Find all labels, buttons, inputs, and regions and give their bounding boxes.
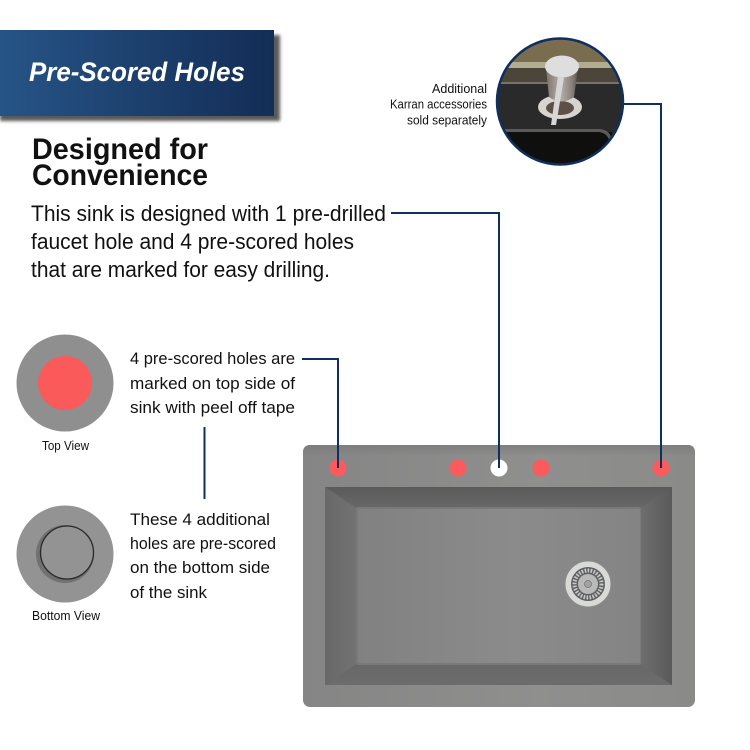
text block: bottom side holes note: holes are pre-scored (130, 534, 276, 553)
pre-drilled faucet hole (490, 460, 508, 476)
text block: top side holes note: marked on top side of (130, 374, 295, 393)
text block: sink description: that are marked for easy drilling. (31, 257, 330, 282)
banner: Pre-Scored Holes (0, 30, 280, 121)
sink basin (325, 487, 672, 685)
text block: accessories note (390, 82, 488, 128)
text block: accessories note: sold separately (407, 114, 488, 128)
leader line: accessory to right hole (622, 104, 661, 468)
sink: top-down illustration (303, 445, 695, 707)
label: Bottom View: Bottom View (32, 609, 101, 623)
text block: accessories note: Additional (432, 82, 487, 96)
text block: sink description: This sink is designed with 1 pre-drilled (31, 201, 386, 226)
text block: bottom side holes note: of the sink (130, 583, 207, 602)
pre-scored hole markers (330, 460, 670, 476)
text block: accessories note: Karran accessories (390, 98, 487, 112)
heading: Designed for Convenience: Designed for (32, 133, 208, 166)
text block: sink description (31, 201, 386, 282)
text block: top side holes note (130, 349, 295, 417)
icon: drain strainer (565, 561, 611, 607)
banner: Pre-Scored Holes: Pre-Scored Holes (29, 57, 245, 87)
leader line: description to faucet hole (391, 213, 499, 468)
divider line between hole notes (204, 427, 206, 499)
text block: bottom side holes note: These 4 additional (130, 510, 270, 529)
heading: Designed for Convenience: Convenience (32, 159, 208, 192)
text block: bottom side holes note (130, 510, 276, 602)
leader line: top side note to left hole (302, 359, 338, 468)
icon: soap dispenser accessory photo (495, 36, 626, 168)
icon: bottom view of pre-scored hole (16, 506, 114, 602)
heading: Designed for Convenience (32, 133, 208, 192)
text block: bottom side holes note: on the bottom side (130, 558, 270, 577)
text block: top side holes note: sink with peel off tape (130, 398, 295, 417)
label: Top View: Top View (42, 439, 90, 453)
text block: top side holes note: 4 pre-scored holes are (130, 349, 295, 368)
text block: sink description: faucet hole and 4 pre-scored holes (31, 229, 354, 254)
icon: top view of pre-scored hole (16, 334, 114, 432)
